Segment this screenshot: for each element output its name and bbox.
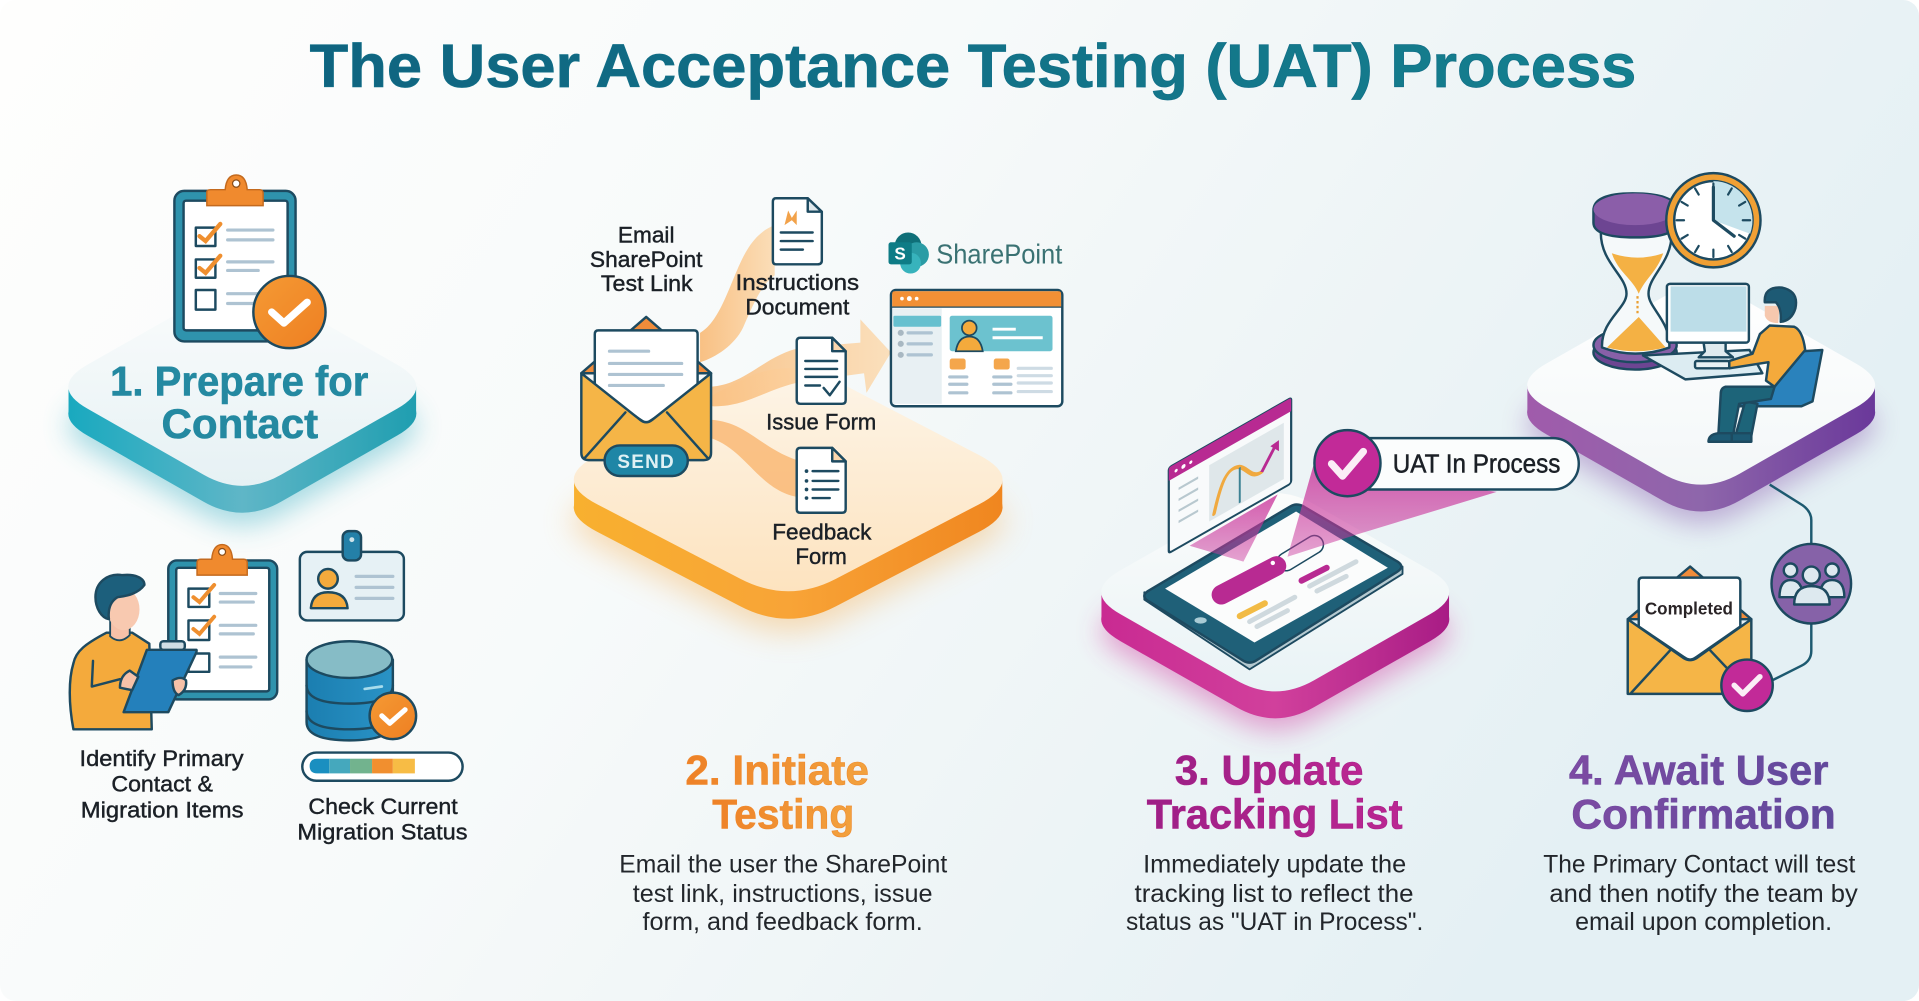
icon: hourglass: [1593, 193, 1677, 370]
arrow: connector line: [1770, 485, 1811, 680]
text: step 2 description: [619, 851, 947, 936]
label: issue form: Issue Form: [766, 410, 876, 435]
text: step 4 description: email upon completion.: [1575, 908, 1832, 936]
label: identify primary contact: [80, 746, 244, 822]
icon: sharepoint logo: S: [894, 243, 906, 263]
icon: instructions document: [773, 198, 822, 264]
bar: magenta status bar: [1221, 561, 1276, 595]
label: check current migration status: Migration Status: [297, 819, 468, 844]
label: email sharepoint test link: Test Link: [601, 271, 693, 296]
icon: floating window: [1169, 398, 1291, 553]
heading: step 3: Tracking List: [1147, 790, 1403, 837]
text: step 3 description: tracking list to reflect the: [1135, 880, 1414, 908]
icon: sharepoint logo: [889, 233, 1062, 274]
text: step 4 description: [1543, 851, 1858, 936]
heading: step 4: 4. Await User: [1569, 746, 1828, 793]
icon: completed envelope: Completed: [1645, 598, 1733, 618]
heading: step 4: Confirmation: [1571, 790, 1836, 837]
text: step 2 description: form, and feedback form.: [643, 908, 923, 936]
icon: envelope with send: SEND: [617, 452, 675, 473]
callout: UAT in process: UAT In Process: [1393, 450, 1560, 478]
label: identify primary contact: Contact &: [111, 772, 213, 797]
icon: issue form: [797, 338, 846, 404]
label: feedback form: Feedback: [772, 520, 872, 545]
panel: step 2 initiate testing: [574, 198, 1062, 936]
label: feedback form: Form: [796, 544, 847, 569]
icon: envelope with send: [581, 317, 711, 476]
text: step 2 description: test link, instructions, issue: [633, 880, 933, 908]
icon: team circle: [1772, 544, 1851, 623]
label: check current migration status: Check Current: [308, 794, 458, 819]
icon: database with check: [307, 641, 416, 740]
icon: person with clipboard: [70, 575, 197, 729]
label: instructions document: Instructions: [736, 270, 859, 295]
heading: step 2: [685, 746, 869, 837]
heading: step 1: Contact: [162, 400, 318, 447]
heading: step 3: 3. Update: [1175, 746, 1363, 793]
text: step 2 description: Email the user the SharePoint: [619, 851, 947, 879]
label: instructions document: Document: [745, 294, 850, 319]
platform: teal: [68, 288, 416, 525]
icon: completed envelope: [1628, 567, 1773, 711]
title: The User Acceptance Testing (UAT) Process: [310, 32, 1636, 100]
heading: step 1: [110, 357, 368, 447]
text: step 4 description: and then notify the team by: [1549, 880, 1858, 908]
text: step 4 description: The Primary Contact will test: [1543, 851, 1855, 879]
callout: UAT in process: [1314, 430, 1579, 496]
label: identify primary contact: Identify Primary: [80, 746, 244, 771]
icon: clock: [1666, 173, 1761, 267]
text: step 3 description: Immediately update the: [1143, 851, 1406, 879]
platform: orange: [574, 368, 1003, 633]
icon: sharepoint window: [891, 290, 1062, 406]
label: email sharepoint test link: [590, 222, 703, 296]
icon: sharepoint logo: SharePoint: [936, 239, 1062, 270]
label: check current migration status: [297, 794, 468, 844]
platform: purple: [1527, 286, 1875, 524]
icon: clipboard with badge: [174, 175, 326, 348]
icon: progress bar: [302, 753, 463, 781]
icon: checklist board: [168, 545, 277, 699]
label: feedback form: [772, 520, 872, 569]
label: email sharepoint test link: SharePoint: [590, 247, 703, 272]
heading: step 3: [1147, 746, 1403, 837]
text: step 3 description: [1126, 851, 1423, 936]
arrows: flow ribbons: [700, 225, 891, 497]
heading: step 4: [1569, 746, 1836, 837]
icon: id badge: [300, 531, 404, 620]
panel: step 3 update tracking list: [1101, 398, 1579, 936]
icon: feedback form: [797, 448, 846, 513]
heading: step 2: 2. Initiate: [685, 746, 869, 793]
text: step 3 description: status as "UAT in Process".: [1126, 908, 1423, 936]
label: email sharepoint test link: Email: [618, 222, 674, 247]
label: identify primary contact: Migration Items: [81, 797, 244, 822]
icon: person at computer: [1643, 284, 1822, 442]
panel: step 1 prepare for contact: [68, 175, 468, 844]
heading: step 2: Testing: [712, 790, 854, 837]
heading: step 1: 1. Prepare for: [110, 357, 368, 404]
panel: step 4 await user confirmation: [1527, 173, 1875, 936]
label: instructions document: [736, 270, 859, 319]
icon: tablet: [1144, 504, 1403, 669]
platform: magenta: [1101, 493, 1449, 731]
arrow: projection beams: [1190, 466, 1497, 562]
